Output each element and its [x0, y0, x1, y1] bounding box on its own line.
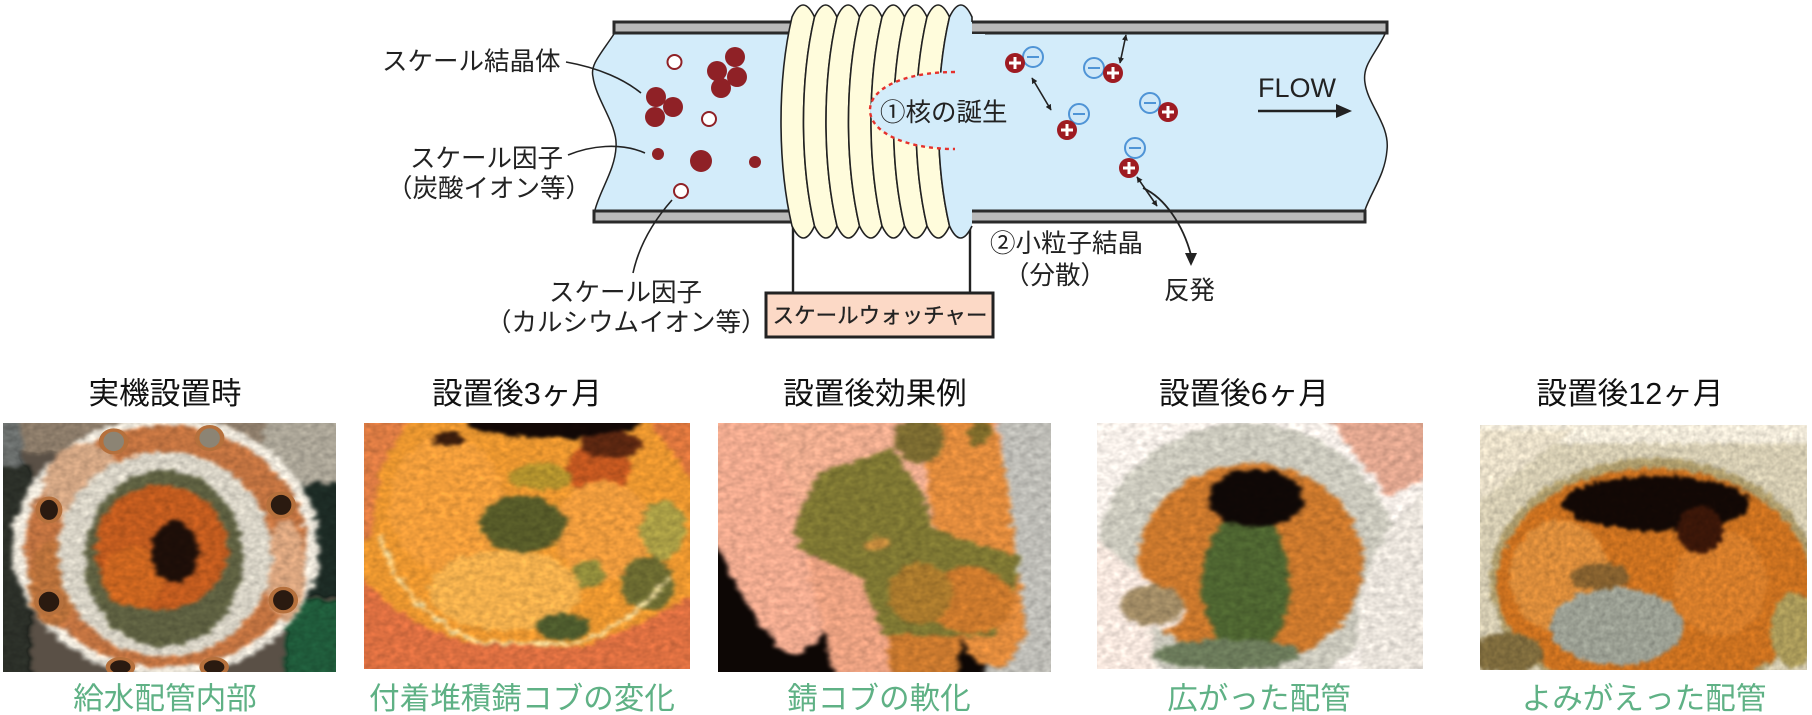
label: scale factor calcium: スケール因子: [549, 279, 702, 307]
scale watcher box: スケールウォッチャー: [773, 304, 987, 328]
plus signs: [1009, 57, 1174, 174]
nucleation zone: [870, 72, 958, 149]
pipe diagram: [382, 5, 1387, 337]
label: scale factor carbonate: スケール因子: [410, 145, 563, 173]
pipe water right: [970, 34, 1387, 210]
caption 4: 広がった配管: [1167, 682, 1351, 715]
crystal clusters: [645, 47, 761, 172]
label: carbonate ions: （炭酸イオン等）: [387, 175, 591, 203]
photo 4: widened pipe: [1097, 423, 1423, 669]
pipe water left: [592, 34, 800, 210]
nucleation dashed outline: [870, 72, 955, 149]
label: dispersion: （分散）: [1004, 262, 1106, 290]
photo 3: softened rust nodule in hand: [718, 423, 1051, 672]
caption 5: よみがえった配管: [1522, 682, 1766, 715]
label: repulsion: 反発: [1164, 277, 1215, 305]
label: nucleation: ①核の誕生: [880, 99, 1008, 127]
coil end lobe outline: [938, 5, 972, 238]
photo 2: rust nodule change: [364, 423, 690, 669]
photo 1: pipe interior: [3, 423, 336, 672]
negative ions: [1023, 47, 1160, 158]
heading 3: 設置後効果例: [783, 377, 967, 411]
label: small crystals: ②小粒子結晶: [990, 230, 1143, 258]
heading 2: 設置後3ヶ月: [432, 377, 602, 411]
caption 2: 付着堆積錆コブの変化: [369, 682, 675, 715]
repulsion arrows: [1032, 35, 1157, 206]
label: scale crystals: スケール結晶体: [382, 48, 561, 76]
positive ions: [1005, 53, 1178, 178]
leader lines: [566, 62, 672, 273]
heading 5: 設置後12ヶ月: [1536, 377, 1724, 411]
heading 1: 実機設置時: [89, 377, 241, 411]
pipe cut edges: [592, 34, 1387, 210]
calcium ions: [668, 55, 716, 198]
heading 4: 設置後6ヶ月: [1159, 377, 1329, 411]
coil end lobe: [938, 5, 985, 238]
caption 3: 錆コブの軟化: [787, 682, 971, 715]
pipe walls: [594, 22, 1387, 222]
scale watcher box: [766, 293, 993, 337]
label: calcium ions: （カルシウムイオン等）: [486, 309, 767, 337]
flow label: FLOW: [1258, 73, 1337, 103]
coil: [781, 5, 950, 238]
coil leads: [793, 222, 970, 293]
flow arrow: [1258, 104, 1352, 118]
caption 1: 給水配管内部: [73, 682, 257, 715]
repulsion curve arrow: [1143, 188, 1197, 266]
photo 5: restored pipe: [1480, 425, 1807, 670]
